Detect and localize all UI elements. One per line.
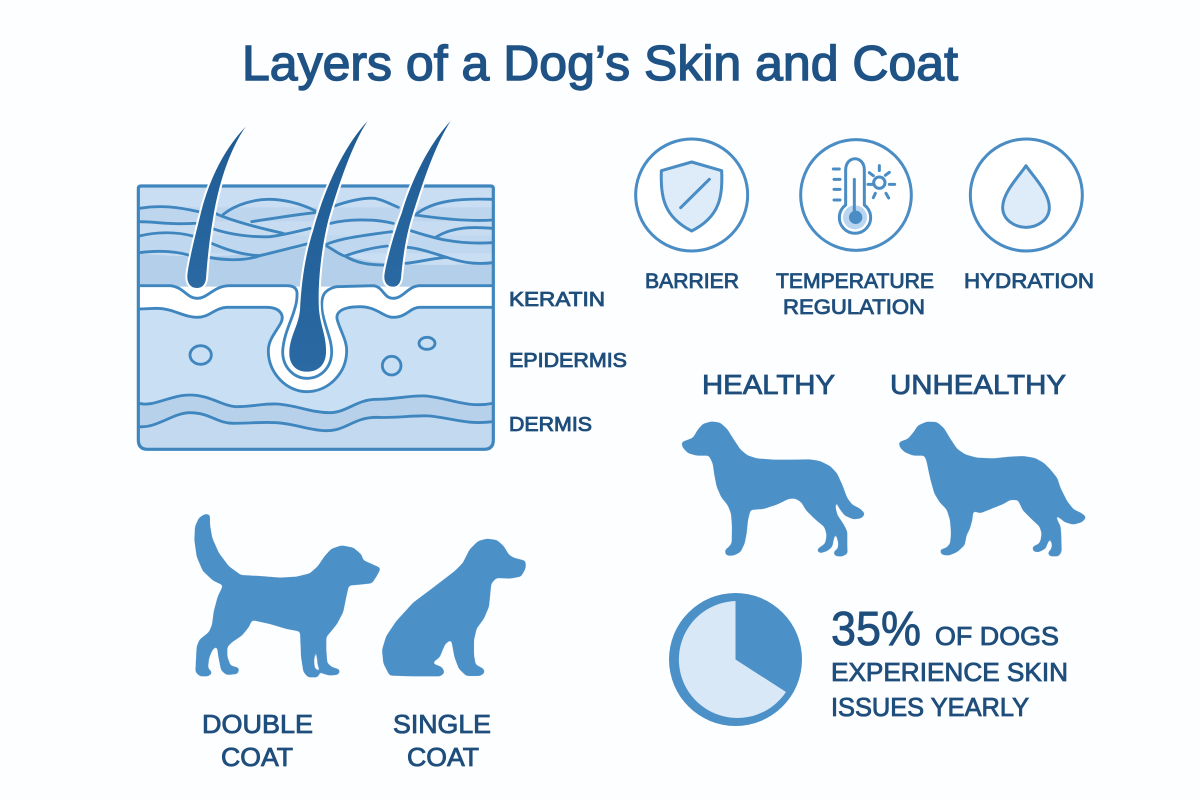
icon: double coat dog [195,515,380,677]
infographic canvas [136,44,1093,767]
single coat label: COAT [407,742,479,772]
layer labels [509,289,627,436]
icon: thermometer and sun [801,140,911,250]
healthy heading: HEALTHY [702,369,835,400]
single coat label [393,709,491,772]
layer labels: EPIDERMIS [509,350,627,372]
function labels: BARRIER [645,270,739,293]
hair: right [384,121,451,287]
double and single coat dog silhouettes [195,515,525,677]
statistic text: 35% [831,603,921,656]
single coat label: SINGLE [393,709,491,739]
statistic text [831,603,1068,722]
hair: centre [289,121,368,372]
unhealthy heading: UNHEALTHY [890,369,1066,400]
function labels: HYDRATION [964,270,1094,293]
pie chart: 35% [669,593,802,726]
function labels: TEMPERATURE [776,270,934,293]
healthy and unhealthy dog silhouettes [682,422,1086,556]
layer labels: DERMIS [509,414,592,436]
title: Layers of a Dog’s Skin and Coat [242,37,958,91]
double coat label [202,709,313,772]
icon: unhealthy dog [899,422,1086,556]
double coat label: COAT [221,742,293,772]
layer labels: KERATIN [509,289,605,311]
statistic text: OF DOGS [935,621,1059,651]
icon: healthy dog [682,422,864,556]
icon: shield barrier [636,139,748,251]
function labels: REGULATION [783,296,925,319]
function icons [636,139,1082,251]
icon: single coat dog [383,539,525,676]
statistic text: ISSUES YEARLY [831,692,1029,722]
hair: left [187,127,246,288]
icon: water drop [970,139,1082,251]
double coat label: DOUBLE [202,709,313,739]
function labels [645,270,1094,319]
statistic text: EXPERIENCE SKIN [831,657,1068,687]
skin layer diagram [138,121,493,450]
